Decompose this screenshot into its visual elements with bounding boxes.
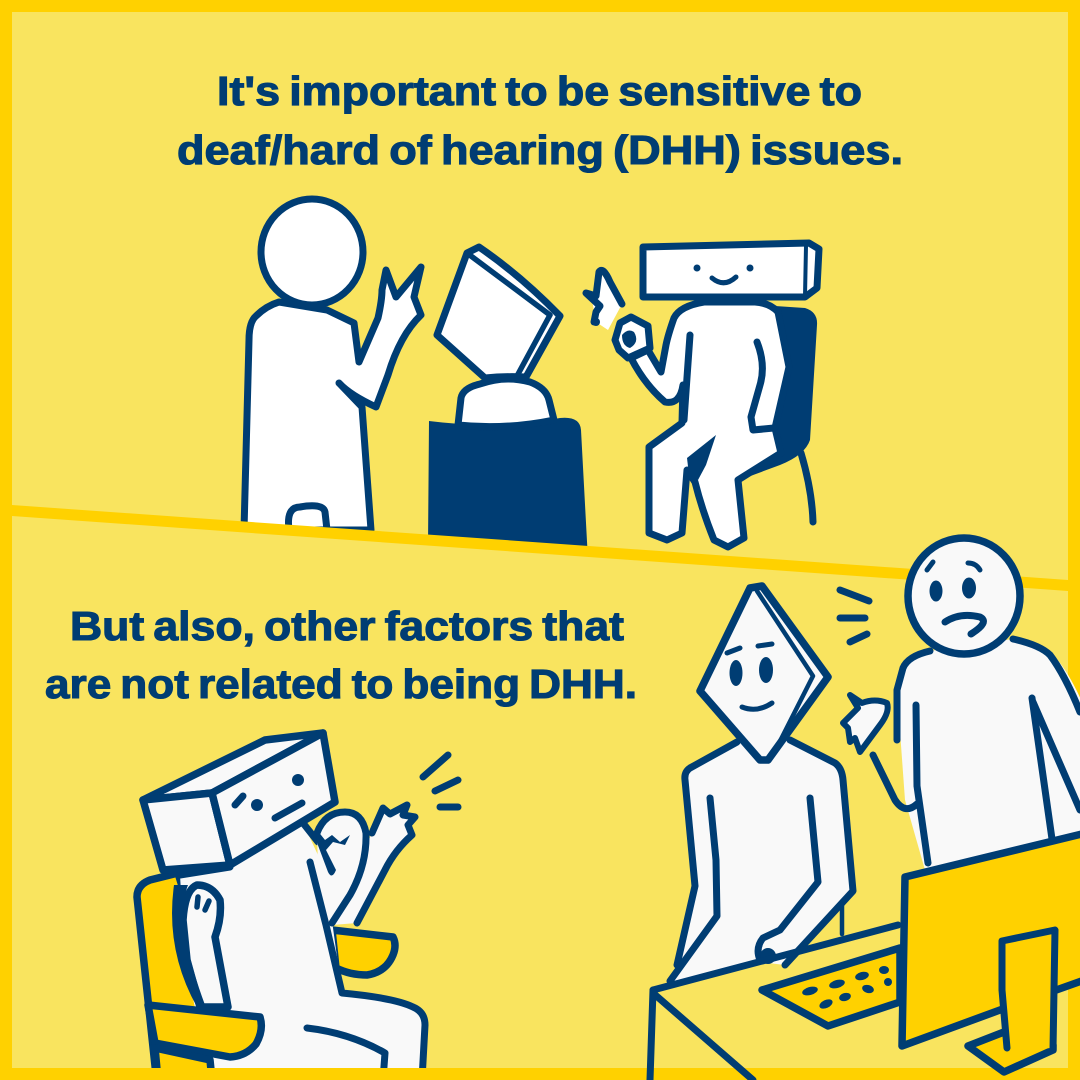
- person: rectangle head seated: [586, 243, 819, 547]
- heading: middle: are not related to being DHH.: [45, 661, 637, 707]
- scene 2: rectangle head person in yellow chair: [137, 733, 458, 1080]
- divider stripe: [12, 505, 1068, 591]
- person: diamond head at desk: [670, 586, 853, 985]
- heading: top: deaf/hard of hearing (DHH) issues.: [177, 127, 903, 173]
- right armrest: [332, 930, 395, 975]
- sound lines: [423, 755, 458, 807]
- keyboard: [762, 948, 900, 1026]
- person: round head worried: [843, 538, 1080, 870]
- chair back: [133, 872, 195, 1068]
- person: round head signing: [244, 199, 421, 530]
- sound lines: worried person: [840, 590, 869, 642]
- right fist: [317, 816, 363, 918]
- body: [180, 823, 425, 1080]
- left armrest: [148, 1005, 261, 1057]
- right raised arm: [332, 805, 415, 925]
- person: book head seen from behind: [428, 247, 588, 560]
- heading: top: It's important to be sensitive to: [217, 68, 862, 114]
- scene 1: people talking: [244, 199, 819, 560]
- box head: [143, 733, 335, 870]
- left arm: [183, 885, 228, 1007]
- heading: middle: [45, 603, 637, 707]
- chair: dark: [751, 306, 818, 526]
- heading: top: [177, 68, 903, 173]
- monitor with stand: [902, 832, 1080, 1072]
- heading: middle: But also, other factors that: [70, 603, 624, 649]
- desk: [650, 925, 1080, 1080]
